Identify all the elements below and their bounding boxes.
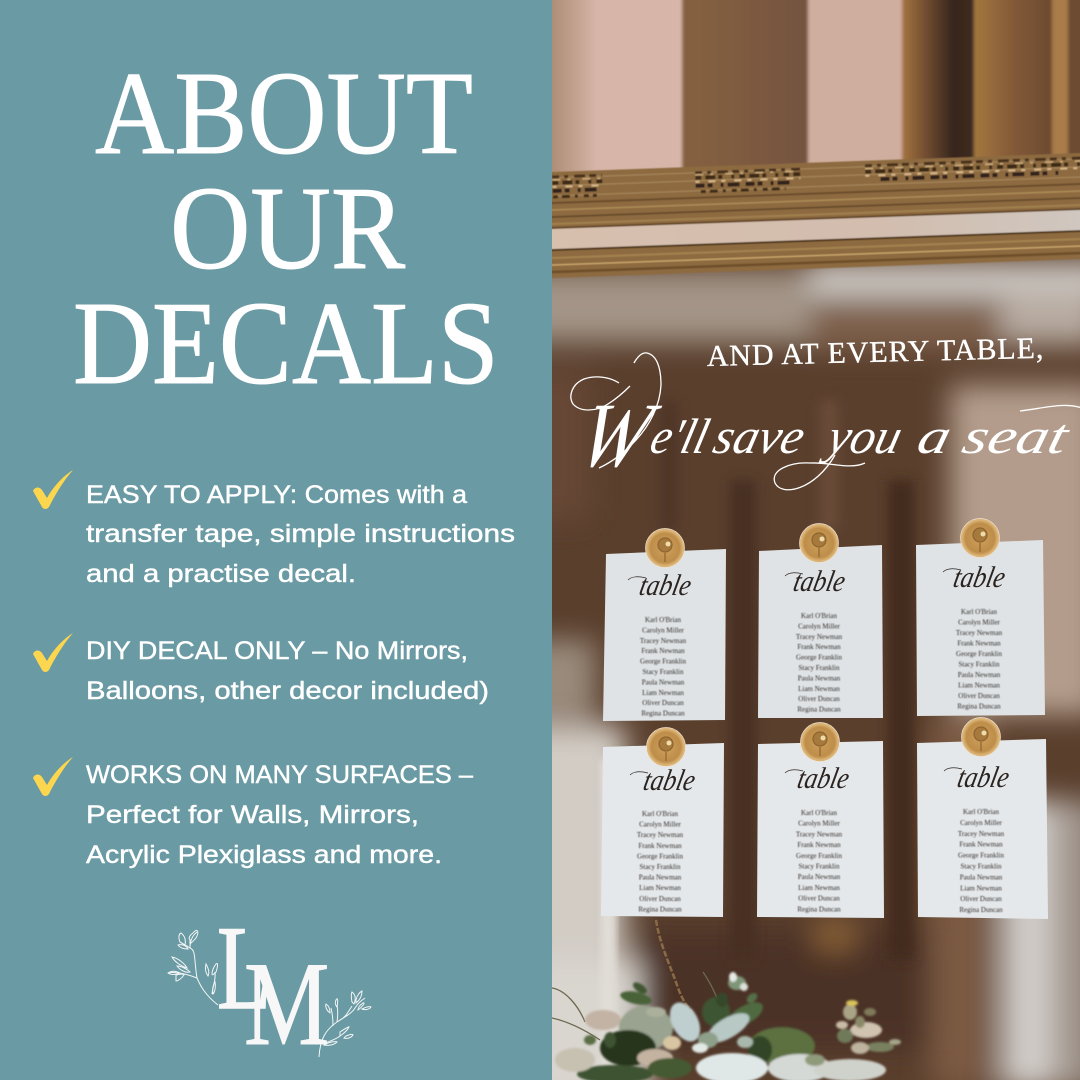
- seating card 5: [757, 722, 884, 918]
- feature: works on many surfaces: Perfect for Walls, Mirrors,: [86, 801, 419, 829]
- seating card 5: Liam Newman: [798, 884, 840, 892]
- seating card 2: George Franklin: [796, 654, 842, 662]
- seating card 1: [603, 528, 726, 721]
- callout: decal script line: you: [817, 409, 908, 464]
- seating card 1: George Franklin: [640, 658, 686, 666]
- seating card 6: Tracey Newman: [958, 830, 1005, 838]
- callout: decal script line: W: [568, 384, 669, 486]
- seating card 2: Tracey Newman: [796, 633, 843, 641]
- seating card 2: Karl O'Brian: [801, 612, 838, 620]
- seating card 1: Karl O'Brian: [645, 616, 682, 624]
- callout: decal line one: AND AT EVERY TABLE,: [706, 332, 1045, 373]
- title: OUR: [170, 162, 405, 294]
- seating card 5: Carolyn Miller: [798, 820, 841, 828]
- seating card 2: Liam Newman: [798, 685, 840, 693]
- seating card 3: Carolyn Miller: [958, 618, 1001, 626]
- seating card 2: table: [790, 565, 848, 598]
- feature: works on many surfaces: [33, 757, 473, 869]
- icon: right sprig: [319, 991, 371, 1057]
- feature list: [33, 470, 515, 869]
- callout: decal script line: a: [912, 409, 957, 464]
- seating card 4: Paula Newman: [639, 874, 682, 882]
- seating card 2: [758, 524, 883, 718]
- seating card 6: Liam Newman: [960, 884, 1002, 892]
- seating card 4: Tracey Newman: [637, 831, 684, 839]
- seating card 4: Stacy Franklin: [639, 863, 681, 871]
- seating card 3: Karl O'Brian: [961, 608, 998, 616]
- seating card 4: Liam Newman: [639, 884, 681, 892]
- seating card 3: Oliver Duncan: [958, 692, 1000, 700]
- seating card 4: table: [640, 764, 698, 797]
- seating card 6: Paula Newman: [960, 873, 1003, 881]
- feature: works on many surfaces: Acrylic Plexiglass and more.: [86, 841, 442, 869]
- photo: floral arrangement: [552, 920, 901, 1080]
- seating card 1: Oliver Duncan: [642, 699, 684, 707]
- seating card 6: Oliver Duncan: [960, 895, 1002, 903]
- seating card 5: table: [794, 762, 852, 795]
- callout: decal script line: save: [708, 409, 811, 464]
- photo: columns above the frame: [548, 0, 1080, 180]
- seating card 6: George Franklin: [958, 852, 1004, 860]
- seating card 1: Paula Newman: [642, 678, 685, 686]
- feature: diy decal only: Balloons, other decor included): [86, 677, 489, 705]
- seating card 5: Stacy Franklin: [798, 862, 840, 870]
- feature: works on many surfaces: WORKS ON MANY SURFACES –: [86, 761, 473, 789]
- feature: diy decal only: [33, 633, 489, 705]
- icon: left sprig: [168, 930, 218, 1005]
- seating card 2: Regina Duncan: [797, 706, 841, 714]
- seating card 2: Carolyn Miller: [798, 622, 841, 630]
- seating card 4: Regina Duncan: [638, 905, 682, 913]
- feature: easy to apply: and a practise decal.: [86, 560, 356, 588]
- callout: decal script line: [568, 353, 1080, 490]
- seating card 5: Tracey Newman: [796, 830, 843, 838]
- feature: easy to apply: EASY TO APPLY: Comes with a: [86, 481, 467, 509]
- seating card 3: Paula Newman: [958, 671, 1001, 679]
- title: DECALS: [73, 277, 499, 409]
- seating card 6: table: [954, 761, 1012, 794]
- feature: easy to apply: [33, 470, 515, 588]
- seating card 4: Carolyn Miller: [639, 821, 682, 829]
- seating card 1: Liam Newman: [642, 689, 684, 697]
- seating card 3: Frank Newman: [957, 640, 1001, 648]
- seating card 5: Frank Newman: [797, 841, 841, 849]
- seating card 1: table: [636, 569, 694, 602]
- seating card 2: Frank Newman: [797, 643, 841, 651]
- seating card 3: George Franklin: [956, 650, 1002, 658]
- seating card 5: Regina Duncan: [797, 905, 841, 913]
- seating card 6: Karl O'Brian: [963, 808, 1000, 816]
- callout: decal script line: e'll: [645, 408, 715, 464]
- title: ABOUT: [95, 47, 473, 179]
- seating card 4: [601, 728, 724, 917]
- seating card 5: Paula Newman: [798, 873, 841, 881]
- seating card 4: George Franklin: [637, 852, 683, 860]
- seating card 1: Tracey Newman: [640, 637, 687, 645]
- seating card 6: Frank Newman: [959, 841, 1003, 849]
- seating card 2: Oliver Duncan: [798, 695, 840, 703]
- seating card 2: Stacy Franklin: [798, 664, 840, 672]
- seating card 1: Regina Duncan: [641, 710, 685, 718]
- letter M: M: [244, 937, 329, 1071]
- seating card 6: Carolyn Miller: [960, 819, 1003, 827]
- feature: easy to apply: transfer tape, simple instructions: [86, 520, 515, 548]
- photo: ornate gold frame: [540, 152, 1080, 278]
- seating card 6: [917, 718, 1048, 919]
- seating card 1: Carolyn Miller: [642, 626, 685, 634]
- seating card 3: table: [950, 561, 1008, 594]
- seating card 4: Karl O'Brian: [642, 810, 679, 818]
- seating card 3: Tracey Newman: [956, 629, 1003, 637]
- seating card 3: Regina Duncan: [957, 702, 1001, 710]
- seating card 5: George Franklin: [796, 852, 842, 860]
- seating card 5: Karl O'Brian: [801, 809, 838, 817]
- seating card 2: Paula Newman: [798, 674, 841, 682]
- seating card 1: Frank Newman: [641, 647, 685, 655]
- seating card 1: Stacy Franklin: [642, 668, 684, 676]
- seating card 3: [916, 518, 1045, 716]
- photo panel: mirror seating chart: [520, 0, 1080, 1080]
- seating card 4: Oliver Duncan: [639, 895, 681, 903]
- panel: teal text panel: [0, 0, 552, 1080]
- callout: decal script line: seat: [957, 408, 1076, 464]
- seating card 3: Liam Newman: [958, 682, 1000, 690]
- seating card 3: Stacy Franklin: [958, 660, 1000, 668]
- seating card 6: Stacy Franklin: [960, 862, 1002, 870]
- title: [73, 47, 499, 409]
- photo: blurred room background: [552, 258, 1080, 1080]
- feature: diy decal only: DIY DECAL ONLY – No Mirrors,: [86, 637, 468, 665]
- seating card 5: Oliver Duncan: [798, 895, 840, 903]
- letter L: L: [217, 901, 271, 1034]
- logo: LM monogram with sprigs: [168, 901, 371, 1071]
- seating card 4: Frank Newman: [638, 842, 682, 850]
- seating card 6: Regina Duncan: [959, 906, 1003, 914]
